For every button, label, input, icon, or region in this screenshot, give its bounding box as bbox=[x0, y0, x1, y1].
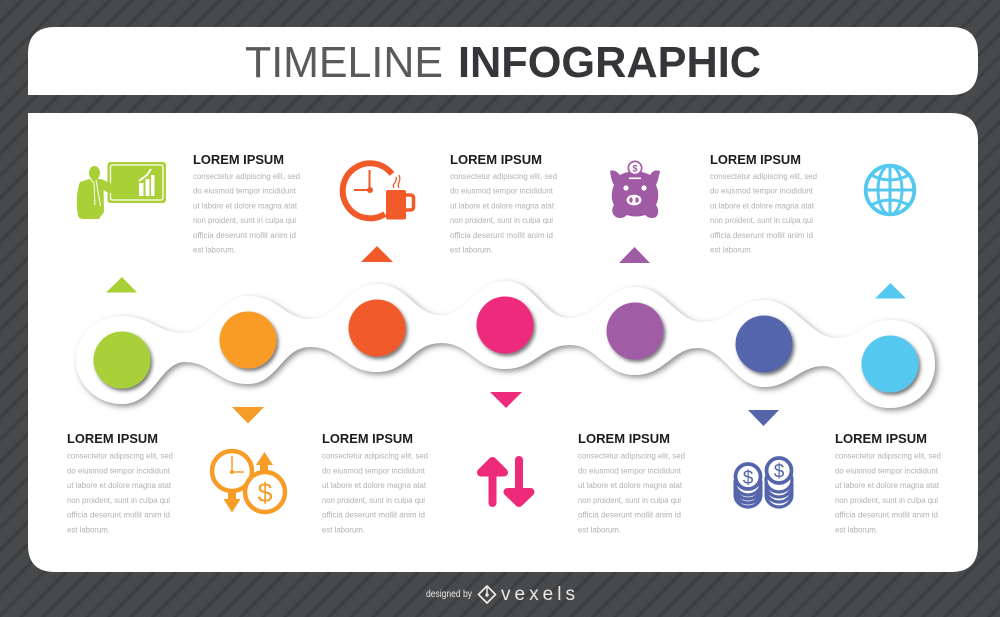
text block: top 3: do eiusmod tempor incididunt bbox=[710, 187, 814, 196]
text block: top 1: do eiusmod tempor incididunt bbox=[193, 187, 297, 196]
text block: top 1: est laborum. bbox=[193, 246, 236, 254]
text block: bottom 1: non proident, sunt in culpa qui bbox=[67, 496, 170, 505]
text block: top 3 bbox=[710, 152, 817, 254]
title: TIMELINE bbox=[245, 38, 443, 87]
text block: bottom 1 bbox=[67, 431, 173, 534]
text block: bottom 3: do eiusmod tempor incididunt bbox=[578, 466, 682, 475]
title bbox=[245, 38, 761, 87]
text block: top 2: do eiusmod tempor incididunt bbox=[450, 187, 554, 196]
icon: piggy bank bbox=[610, 160, 660, 218]
timeline circles bbox=[94, 296, 918, 392]
text block: bottom 2: ut labore et dolore magna atat bbox=[322, 481, 427, 490]
text block: bottom 4: officia deserunt mollit anim id bbox=[835, 511, 938, 520]
text block: bottom 3: LOREM IPSUM bbox=[578, 431, 670, 446]
text block: top 1: LOREM IPSUM bbox=[193, 152, 284, 167]
text block: top 2: ut labore et dolore magna atat bbox=[450, 201, 555, 210]
footer: designed by vexels: designed by bbox=[426, 589, 472, 600]
text block: top 2: est laborum. bbox=[450, 246, 493, 254]
text block: bottom 2: est laborum. bbox=[322, 526, 365, 534]
icon: globe bbox=[865, 165, 915, 215]
title: INFOGRAPHIC bbox=[458, 38, 761, 87]
text block: top 1: officia deserunt mollit anim id bbox=[193, 231, 296, 240]
text block: top 1: non proident, sunt in culpa qui bbox=[193, 216, 296, 225]
text block: top 1 bbox=[193, 152, 300, 254]
icon: coin stacks: $ bbox=[774, 462, 785, 482]
icon: presenter with chart board bbox=[77, 162, 166, 219]
text block: top 3: consectetur adipiscing elit, sed bbox=[710, 172, 817, 181]
text block: bottom 3: non proident, sunt in culpa qui bbox=[578, 496, 681, 505]
text block: bottom 2: officia deserunt mollit anim id bbox=[322, 511, 425, 520]
text block: bottom 2: non proident, sunt in culpa qui bbox=[322, 496, 425, 505]
text block: top 2: consectetur adipiscing elit, sed bbox=[450, 172, 557, 181]
text block: top 3: LOREM IPSUM bbox=[710, 152, 801, 167]
icon: clock, coin and arrows: $ bbox=[257, 478, 273, 508]
icon: clock, coin and arrows bbox=[212, 451, 285, 512]
text block: bottom 3 bbox=[578, 431, 685, 534]
text block: bottom 2 bbox=[322, 431, 428, 534]
text block: top 2: LOREM IPSUM bbox=[450, 152, 542, 167]
text block: bottom 1: consectetur adipiscing elit, sed bbox=[67, 452, 173, 460]
text block: top 1: consectetur adipiscing elit, sed bbox=[193, 172, 300, 181]
text block: bottom 1: est laborum. bbox=[67, 526, 110, 534]
icon: coin stacks bbox=[735, 458, 792, 507]
timeline ribbon bbox=[76, 281, 935, 408]
text block: bottom 1: ut labore et dolore magna atat bbox=[67, 481, 172, 490]
text block: bottom 1: LOREM IPSUM bbox=[67, 431, 158, 446]
text block: top 2 bbox=[450, 152, 557, 254]
text block: bottom 4: LOREM IPSUM bbox=[835, 431, 927, 446]
icon: coin stacks: $ bbox=[743, 468, 754, 489]
text block: top 2: officia deserunt mollit anim id bbox=[450, 231, 553, 240]
text block: bottom 2: do eiusmod tempor incididunt bbox=[322, 466, 426, 475]
text block: bottom 3: ut labore et dolore magna atat bbox=[578, 481, 683, 490]
footer: designed by vexels: vexels bbox=[501, 584, 575, 605]
text block: bottom 4: do eiusmod tempor incididunt bbox=[835, 466, 939, 475]
text block: bottom 2: LOREM IPSUM bbox=[322, 431, 413, 446]
text block: top 1: ut labore et dolore magna atat bbox=[193, 201, 298, 210]
text block: bottom 4: ut labore et dolore magna atat bbox=[835, 481, 940, 490]
text block: bottom 2: consectetur adipiscing elit, sed bbox=[322, 452, 428, 460]
text block: bottom 3: officia deserunt mollit anim id bbox=[578, 511, 681, 520]
icon: up and down arrows bbox=[481, 460, 530, 503]
text block: bottom 3: consectetur adipiscing elit, sed bbox=[578, 452, 685, 460]
markers: triangles bbox=[106, 246, 906, 426]
text block: bottom 3: est laborum. bbox=[578, 526, 621, 534]
footer: designed by vexels bbox=[426, 584, 575, 605]
icon: clock and coffee mug bbox=[343, 163, 414, 220]
icon: piggy bank: $ bbox=[632, 164, 638, 174]
text block: bottom 1: do eiusmod tempor incididunt bbox=[67, 466, 171, 475]
title panel bbox=[28, 27, 978, 95]
text block: top 3: est laborum. bbox=[710, 246, 753, 254]
text block: bottom 4: non proident, sunt in culpa qui bbox=[835, 496, 938, 505]
text block: bottom 4: est laborum. bbox=[835, 526, 878, 534]
text block: top 3: ut labore et dolore magna atat bbox=[710, 201, 815, 210]
text block: top 2: non proident, sunt in culpa qui bbox=[450, 216, 553, 225]
text block: top 3: officia deserunt mollit anim id bbox=[710, 231, 813, 240]
text block: bottom 1: officia deserunt mollit anim id bbox=[67, 511, 170, 520]
text block: bottom 4 bbox=[835, 431, 941, 534]
text block: top 3: non proident, sunt in culpa qui bbox=[710, 216, 813, 225]
text block: bottom 4: consectetur adipiscing elit, sed bbox=[835, 452, 941, 460]
main panel bbox=[28, 113, 978, 572]
